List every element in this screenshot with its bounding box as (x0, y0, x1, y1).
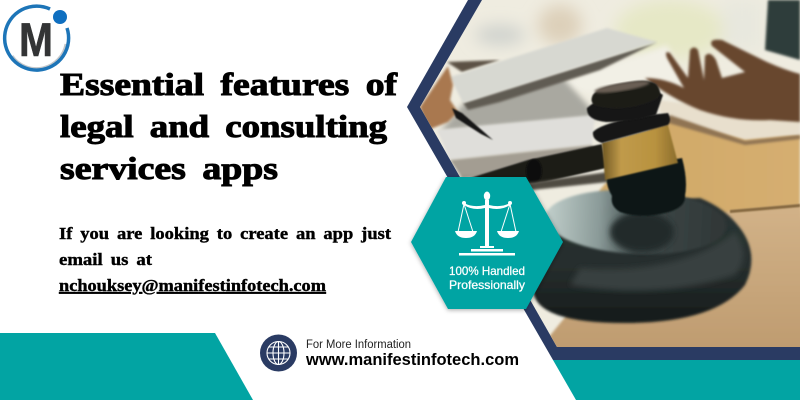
teal corner band: bottom right (553, 360, 800, 400)
logo dot (53, 10, 67, 24)
photo: gavel on a desk with hands (410, 0, 800, 360)
gold band (602, 125, 678, 180)
notebook (658, 100, 800, 140)
intro text with email: If you are looking to create an app just (59, 224, 391, 243)
paper (437, 115, 595, 160)
sound block rim (533, 198, 751, 323)
title (60, 66, 397, 186)
teal corner band: bottom left (0, 333, 253, 400)
badge label: 100% Handled (449, 264, 525, 278)
gavel head mid ring (586, 92, 664, 123)
icon: scales of justice (455, 192, 519, 256)
gavel handle (470, 144, 606, 186)
folder shadow (463, 42, 657, 110)
upper desk (598, 122, 800, 214)
logo letter: M (19, 13, 53, 66)
gavel highlight (594, 79, 650, 95)
handle shadow (520, 172, 608, 190)
rim highlight (570, 232, 744, 291)
badge label (449, 264, 525, 292)
lower desk (550, 207, 800, 347)
footer contact text: For More Information (306, 339, 411, 351)
navy chevron frame (407, 0, 800, 360)
intro text with email: nchouksey@manifestinfotech.com (59, 276, 326, 295)
intro text with email: email us at (59, 250, 152, 269)
cream page behind folder (630, 44, 674, 70)
title: Essential features of (60, 66, 397, 102)
badge label: Professionally (449, 278, 525, 292)
right hand (645, 40, 800, 122)
title: legal and consulting (60, 108, 387, 144)
paper edge (450, 145, 600, 178)
dark stripe in desk (730, 204, 800, 213)
intro text with email (59, 224, 391, 295)
title: services apps (60, 150, 278, 186)
sound block top (546, 188, 726, 255)
gavel head lower ring (593, 113, 670, 143)
logo (5, 6, 69, 70)
gavel head top (592, 81, 660, 108)
dark top of left sleeve (447, 60, 500, 72)
folder (450, 28, 657, 103)
neck shadow (610, 212, 674, 252)
grey document layer (440, 80, 597, 130)
footer contact text (305, 339, 519, 369)
footer contact text: www.manifestinfotech.com (305, 350, 519, 369)
dark sleeve (765, 0, 800, 60)
pen (452, 108, 493, 140)
left hand (420, 66, 458, 130)
icon: globe (260, 334, 297, 372)
badge hexagon (411, 177, 563, 309)
gavel neck (607, 158, 686, 216)
